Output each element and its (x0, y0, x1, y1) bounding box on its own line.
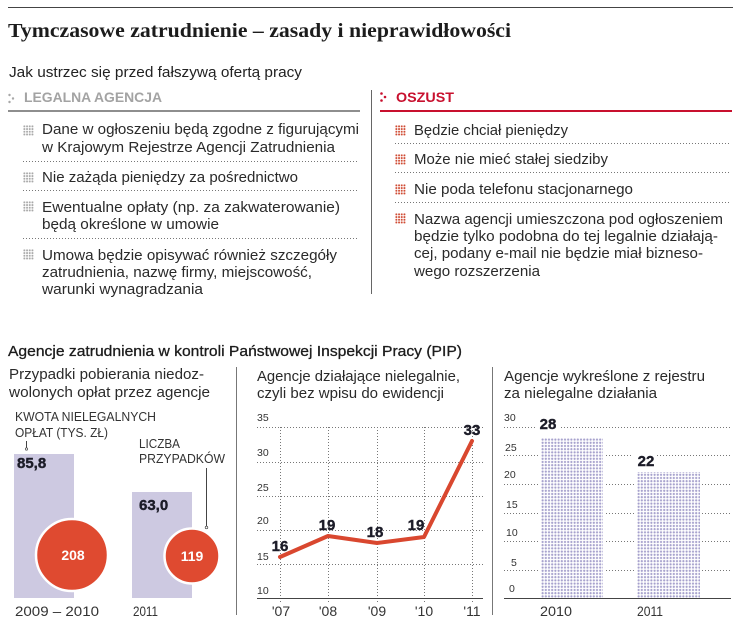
circle: 119 cases: 119 (181, 548, 204, 564)
chart heading: illegal agencies: Agencje działające nielegalnie, (257, 368, 460, 385)
bar: 2011: 22 (638, 453, 654, 470)
x axis labels: '09 (368, 603, 386, 619)
chart heading: illegal agencies (257, 368, 460, 402)
trend line (280, 441, 472, 557)
axis label: 2011: 2011 (133, 603, 158, 619)
bar: 2011 (633, 450, 702, 598)
item: data in the ad (23, 122, 359, 156)
x axis labels: '11 (463, 603, 481, 619)
title: Tymczasowe zatrudnienie – zasady i nieprawidłowości (8, 20, 511, 42)
label: number of cases: PRZYPADKÓW (139, 451, 226, 466)
heading mark: fraudster (380, 92, 386, 102)
circle: 208 cases: 208 (61, 547, 85, 563)
y axis labels: 10 (506, 527, 518, 539)
item: similar name (395, 212, 723, 280)
label: amount of illegal fees (15, 409, 156, 450)
panel: removed agencies bar chart (504, 368, 731, 619)
y axis labels: 20 (257, 515, 269, 527)
section heading: Agencje zatrudnienia w kontroli Państwowej Inspekcji Pracy (PIP) (8, 343, 462, 360)
item: data in the ad: w Krajowym Rejestrze Agencji Zatrudnienia (41, 140, 336, 156)
item: contract: zatrudnienia, nazwę firmy, miejscowość, (42, 265, 312, 281)
value labels (272, 422, 480, 555)
y axis labels (504, 412, 518, 595)
value labels: 19 (408, 517, 424, 534)
panel: fraudster (380, 89, 732, 280)
item: fees (23, 200, 340, 233)
item: no office: Może nie mieć stałej siedziby (414, 152, 609, 168)
chart heading: removed agencies (504, 368, 705, 402)
item: similar name: będzie tylko podobna do tej legalnie działają- (414, 229, 718, 245)
y axis labels: 35 (257, 412, 269, 424)
bar: 2009–2010 (14, 454, 74, 598)
item: contract: warunki wynagradzania (41, 282, 204, 298)
item: no money: Nie zażąda pieniędzy za pośrednictwo (42, 170, 298, 186)
circle: 208 cases (36, 519, 108, 591)
x axis labels: '08 (319, 603, 337, 619)
label: number of cases: LICZBA (139, 436, 180, 451)
bar: 2011 (132, 492, 192, 598)
bar: 2010 (536, 416, 604, 598)
subtitle: Jak ustrzec się przed fałszywą ofertą pracy (9, 64, 303, 81)
y axis labels: 30 (257, 447, 269, 459)
heading: fraudster: OSZUST (396, 89, 454, 105)
chart heading: removed agencies: za nielegalne działania (504, 385, 658, 402)
y axis labels: 25 (505, 442, 517, 454)
value labels: 19 (319, 517, 335, 534)
value labels: 16 (272, 538, 288, 555)
panel: illegal fees chart (8, 366, 226, 619)
panel: illegal agencies line chart (257, 368, 483, 619)
item: wants money: Będzie chciał pieniędzy (414, 123, 569, 139)
y axis labels: 10 (257, 585, 269, 597)
y axis labels (257, 412, 269, 597)
axis label: 2009–2010: 2009 – 2010 (15, 603, 99, 619)
value labels: 33 (464, 422, 480, 439)
y axis labels: 20 (504, 469, 516, 481)
bar: 2010: 28 (540, 416, 556, 433)
item: data in the ad: Dane w ogłoszeniu będą zgodne z figurującymi (42, 122, 359, 138)
item: fees: Ewentualne opłaty (np. za zakwaterowanie) (42, 200, 340, 216)
item: no landline: Nie poda telefonu stacjonarnego (414, 182, 633, 198)
x axis labels: 2011 (637, 603, 663, 619)
heading: legal agency: LEGALNA AGENCJA (24, 89, 162, 105)
label: number of cases (139, 436, 226, 529)
x axis labels: '07 (272, 603, 290, 619)
y axis labels: 15 (506, 499, 518, 511)
item: similar name: cej, podany e-mail nie będzie miał bizneso- (414, 246, 703, 262)
value: 63,0: 63,0 (139, 497, 168, 514)
x axis labels (272, 603, 481, 619)
x axis labels: 2010 (540, 603, 572, 619)
label: amount of illegal fees: OPŁAT (TYS. ZŁ) (15, 425, 108, 440)
item: contract: Umowa będzie opisywać również szczegóły (42, 248, 338, 264)
label: amount of illegal fees: KWOTA NIELEGALNYCH (15, 409, 156, 424)
item: similar name: wego rozszerzenia (413, 264, 541, 280)
x axis labels: '10 (415, 603, 433, 619)
item: fees: będą określone w umowie (42, 217, 219, 233)
y axis labels: 15 (257, 551, 269, 563)
value: 85,8: 85,8 (17, 455, 46, 472)
circle: 119 cases (164, 528, 220, 584)
value labels: 18 (367, 524, 383, 541)
item: similar name: Nazwa agencji umieszczona pod ogłoszeniem (414, 212, 723, 228)
chart heading: illegal agencies: czyli bez wpisu do ewidencji (257, 385, 444, 402)
y axis labels: 30 (504, 412, 516, 424)
item: contract (23, 248, 338, 298)
chart heading: illegal fees: wolonych opłat przez agencje (8, 384, 210, 401)
heading mark: legal agency (8, 94, 14, 103)
chart heading: illegal fees: Przypadki pobierania niedoz- (9, 366, 204, 383)
panel: legal agency (8, 89, 360, 298)
y axis labels: 25 (257, 482, 269, 494)
chart heading: removed agencies: Agencje wykreślone z rejestru (504, 368, 705, 385)
y axis labels: 5 (511, 557, 517, 569)
x axis labels (540, 603, 663, 619)
y axis labels: 0 (509, 583, 515, 595)
chart heading: illegal fees (8, 366, 210, 401)
